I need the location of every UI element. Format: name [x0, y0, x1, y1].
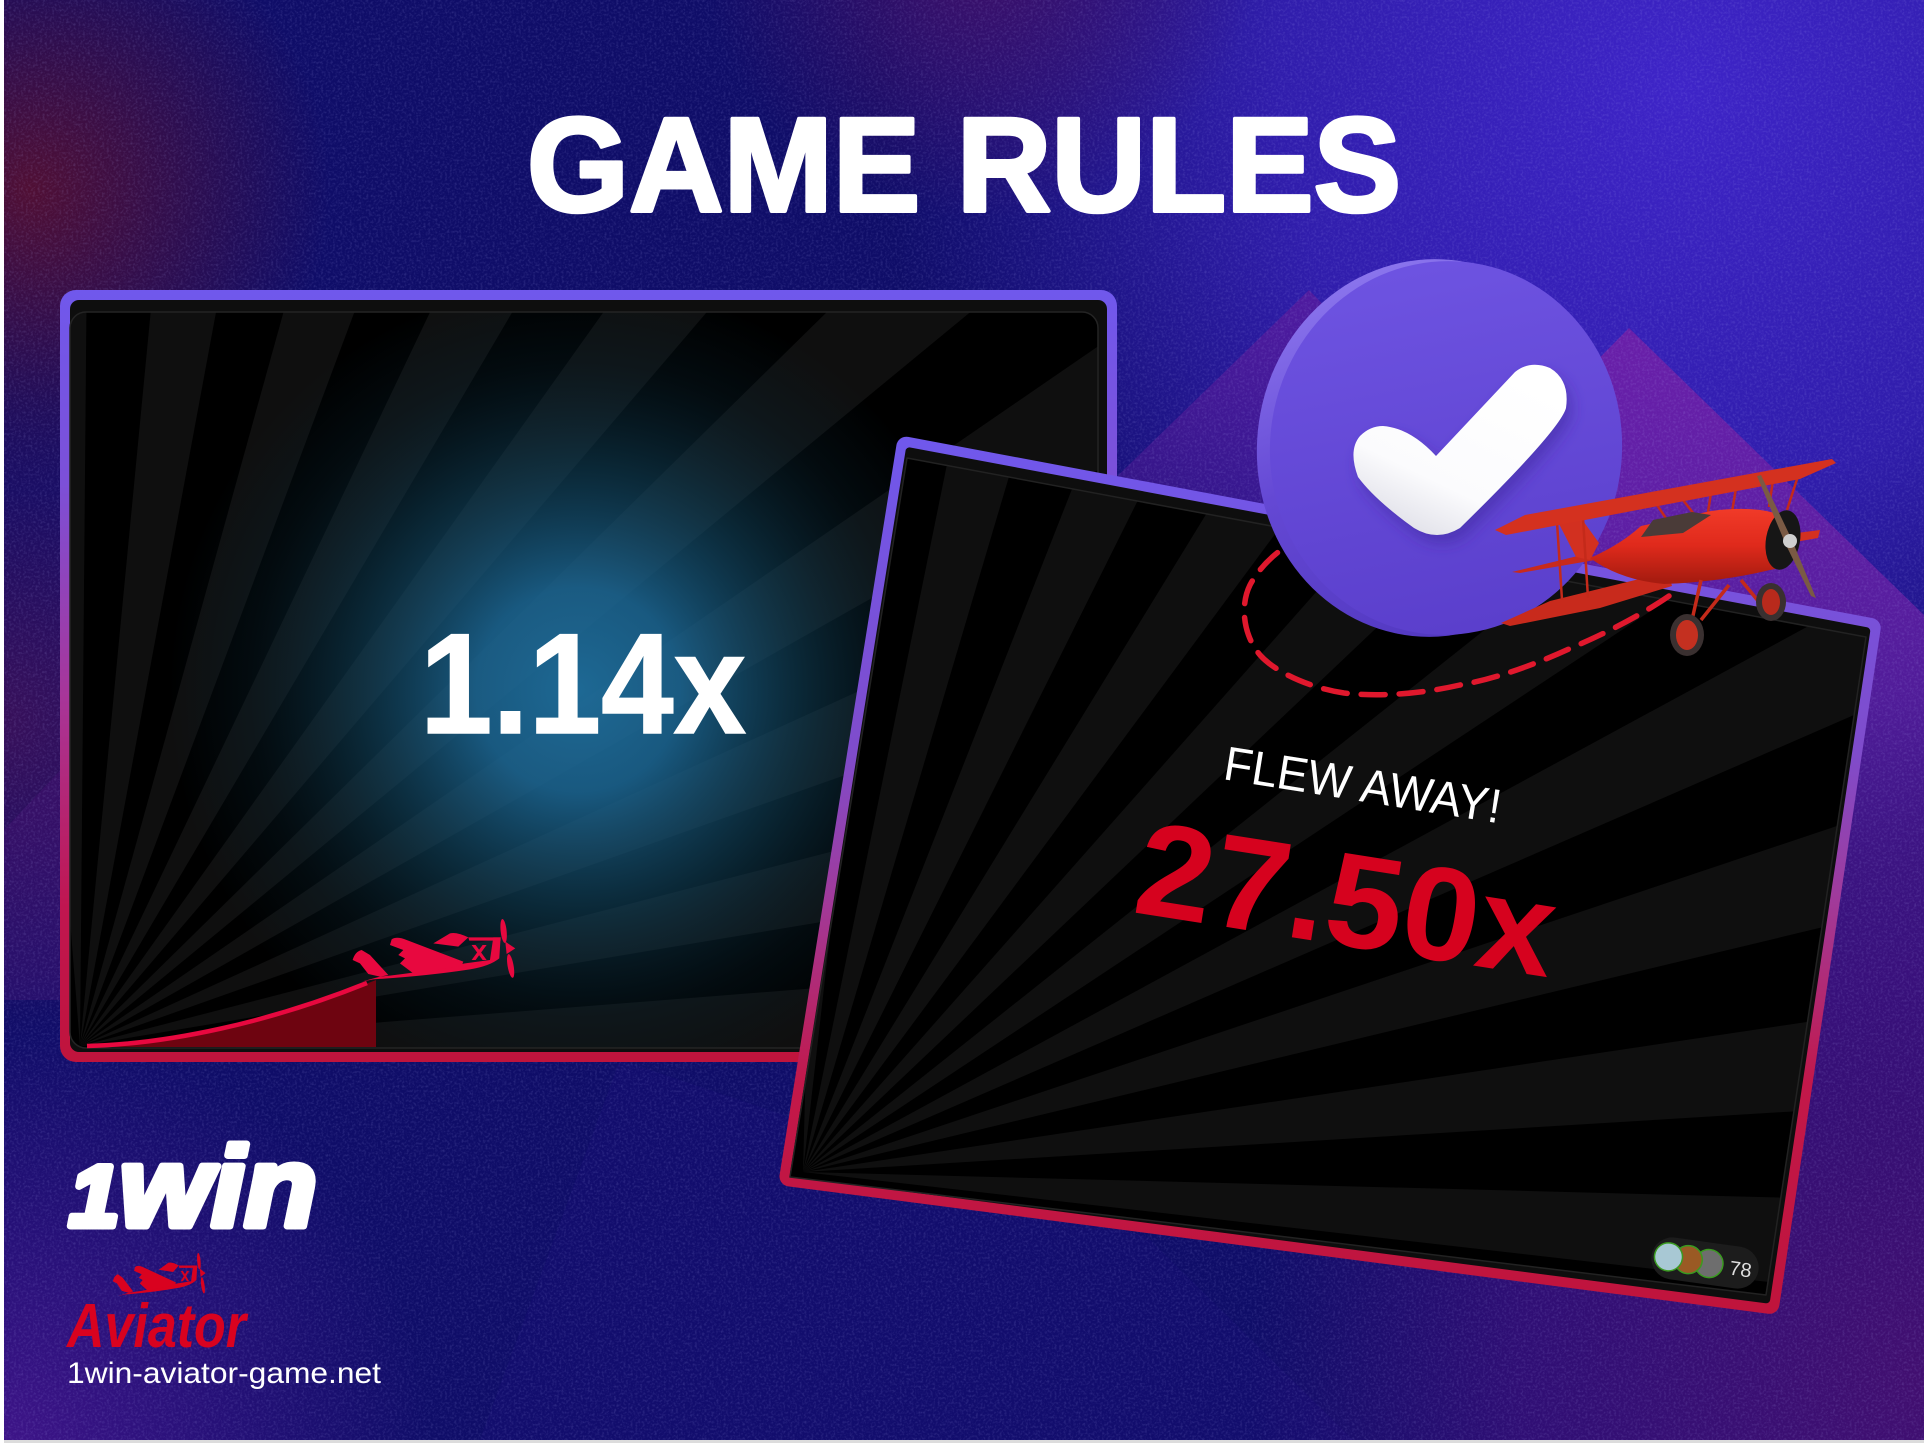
logo: Aviator wordmark: Aviator: [65, 1292, 248, 1361]
text: flew away: FLEW AWAY!: [1220, 738, 1505, 834]
icon: white check mark: [1353, 365, 1567, 535]
logo: aviator plane: [113, 1253, 206, 1296]
player counter pill: [1649, 1235, 1761, 1291]
chart: red flight area: [87, 980, 376, 1047]
panel: right tilted game screen: [780, 436, 1881, 1314]
multiplier 27.50x: 27.50x: [1127, 794, 1566, 1006]
icon: 3D check badge: [1238, 242, 1641, 654]
panel: left game screen: [60, 290, 1117, 1062]
dashed flight path: [1244, 550, 1669, 695]
chart: flight curve: [87, 983, 367, 1046]
icon: red biplane: [1495, 459, 1836, 656]
logo: 1win: 1win: [69, 1124, 317, 1250]
website url: 1win-aviator-game.net: [67, 1357, 382, 1390]
multiplier 1.14x: 1.14x: [420, 605, 746, 764]
icon: aviator plane: [353, 919, 516, 982]
title: GAME RULES: [527, 91, 1401, 240]
player counter pill: 78: [1728, 1258, 1753, 1282]
